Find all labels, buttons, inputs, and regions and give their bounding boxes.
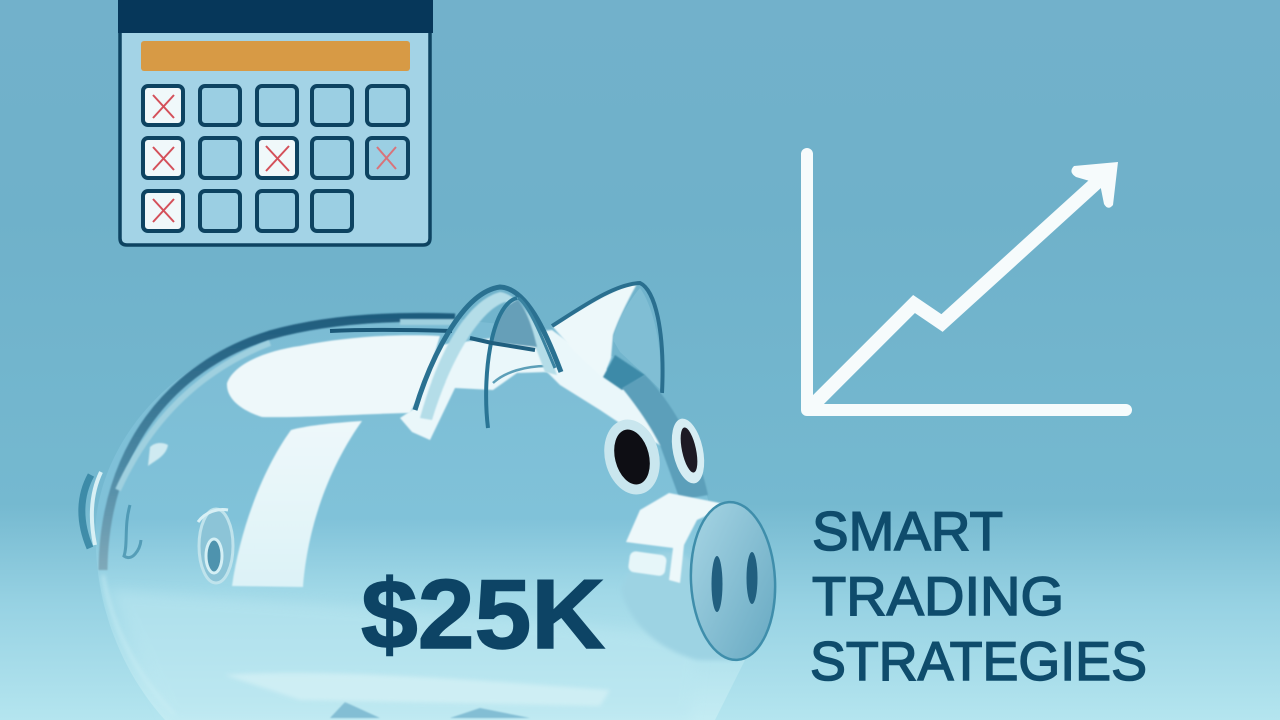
left nostril — [712, 556, 722, 612]
far eye — [666, 416, 710, 486]
floor highlight — [225, 673, 610, 706]
title line 2: TRADING — [812, 565, 1064, 627]
pig rim glass band — [118, 322, 455, 490]
pig shoulder reflection — [400, 330, 680, 455]
calendar day cells — [143, 86, 408, 231]
slot dark ledge — [470, 338, 535, 350]
pig body — [96, 317, 750, 720]
calendar header band — [118, 0, 433, 33]
title line 3: STRATEGIES — [810, 630, 1147, 692]
slot inner glass — [490, 300, 537, 347]
near eye — [597, 414, 667, 500]
calendar page — [120, 0, 430, 245]
pig curved reflection — [232, 421, 362, 587]
snout lower side — [621, 552, 735, 660]
snout small reflection — [628, 551, 667, 577]
pig rim lower line — [330, 330, 452, 331]
snout face — [687, 500, 779, 662]
pig forehead glass — [622, 375, 708, 500]
icon: calendar — [118, 0, 433, 245]
pig bottom glow — [110, 590, 700, 720]
chart arrow head — [1071, 162, 1118, 208]
pig left fade line — [103, 575, 175, 715]
slot inner arch — [486, 298, 517, 428]
chart axes — [807, 154, 1126, 410]
title line 1: SMART — [812, 500, 1003, 562]
ear base shadow — [603, 355, 645, 390]
calendar red crosses — [153, 95, 396, 222]
chart trend arrow — [810, 174, 1106, 408]
right nostril — [746, 552, 758, 604]
back highlight blob — [148, 443, 168, 466]
pig upper reflection — [227, 335, 440, 417]
calendar orange bar — [141, 41, 410, 71]
snout side highlight — [626, 493, 730, 583]
slot outer arch glass — [420, 292, 557, 420]
amount label: $25K — [361, 559, 605, 669]
ear outline — [552, 283, 663, 393]
title — [810, 500, 1147, 692]
icon: growth chart — [807, 154, 1126, 410]
rear foot bump — [198, 509, 233, 583]
ear inner — [613, 288, 661, 390]
pig foot reflection — [330, 702, 530, 718]
rear haunch bump — [82, 472, 141, 558]
ear white front — [552, 282, 638, 378]
pig head rim line — [493, 366, 547, 383]
piggy bank — [82, 282, 779, 720]
slot outer arch — [415, 287, 561, 410]
pig back rim — [103, 317, 455, 570]
slot inner right line — [518, 298, 555, 368]
